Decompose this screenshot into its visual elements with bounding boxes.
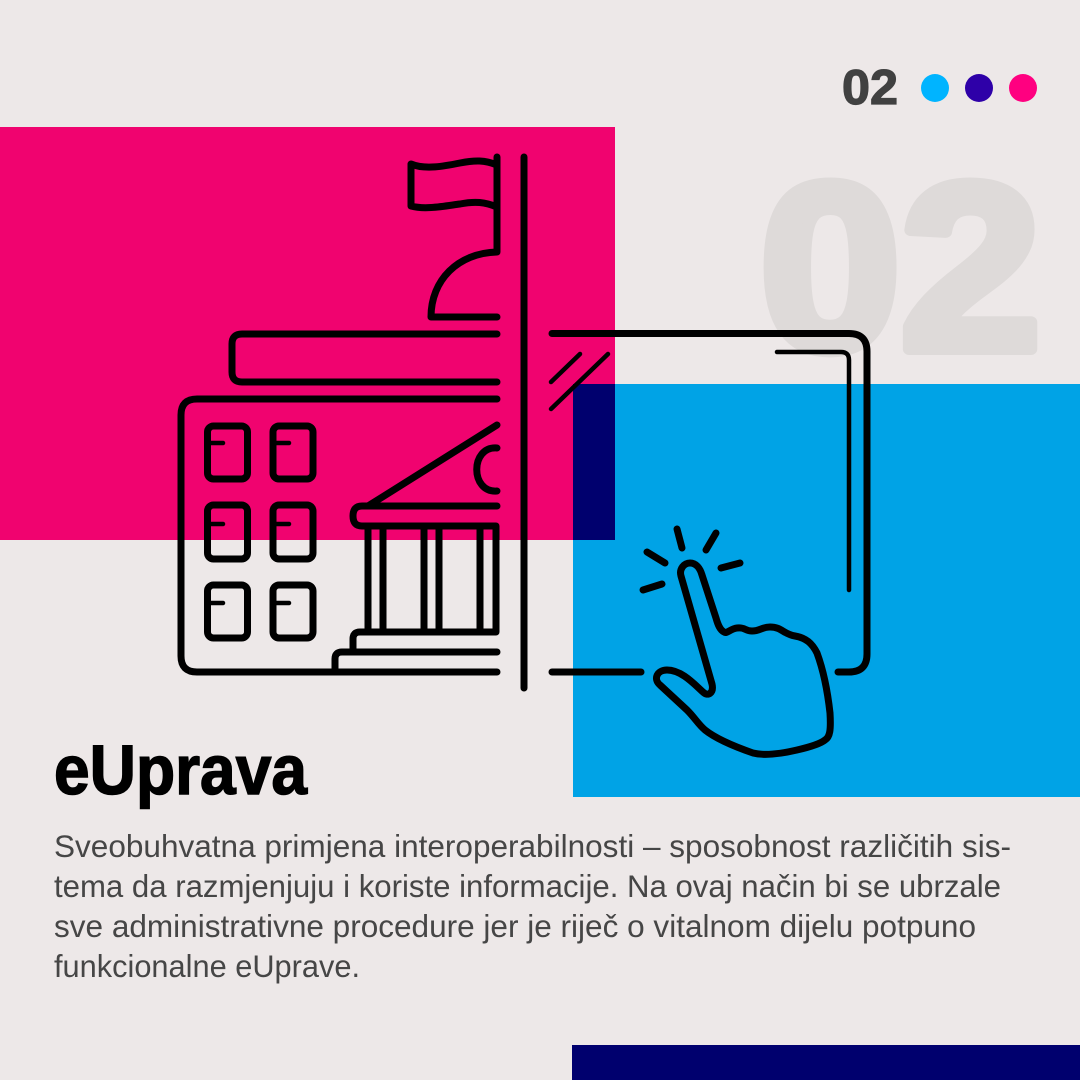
blue panel <box>573 384 1080 797</box>
icon: windows <box>208 426 313 638</box>
icon: central divider <box>520 157 528 688</box>
pagination dots <box>921 74 1037 102</box>
body text: sve administrativne procedure jer je riječ o vitalnom dijelu potpuno <box>54 908 976 944</box>
icon: click sparks <box>643 529 740 590</box>
icon: classical portico <box>335 425 497 672</box>
icon: roof slab <box>232 334 497 382</box>
pink panel <box>0 127 615 540</box>
page number: 02 <box>842 61 898 115</box>
overlap panel <box>573 384 615 540</box>
body text: Sveobuhvatna primjena interoperabilnosti – sposobnost različitih sis- <box>54 828 1011 864</box>
body text: tema da razmjenjuju i koriste informacije. Na ovaj način bi se ubrzale <box>54 868 1001 904</box>
icon: screen frame <box>551 334 867 672</box>
navy footer bar <box>572 1045 1080 1080</box>
icon: flag <box>411 157 497 317</box>
icon: pointing hand <box>656 563 830 754</box>
icon: building outline <box>181 399 497 672</box>
title: eUprava <box>54 731 308 809</box>
large background number: 02 <box>760 135 1041 400</box>
body text: funkcionalne eUprave. <box>54 948 360 984</box>
body text <box>54 828 1011 984</box>
